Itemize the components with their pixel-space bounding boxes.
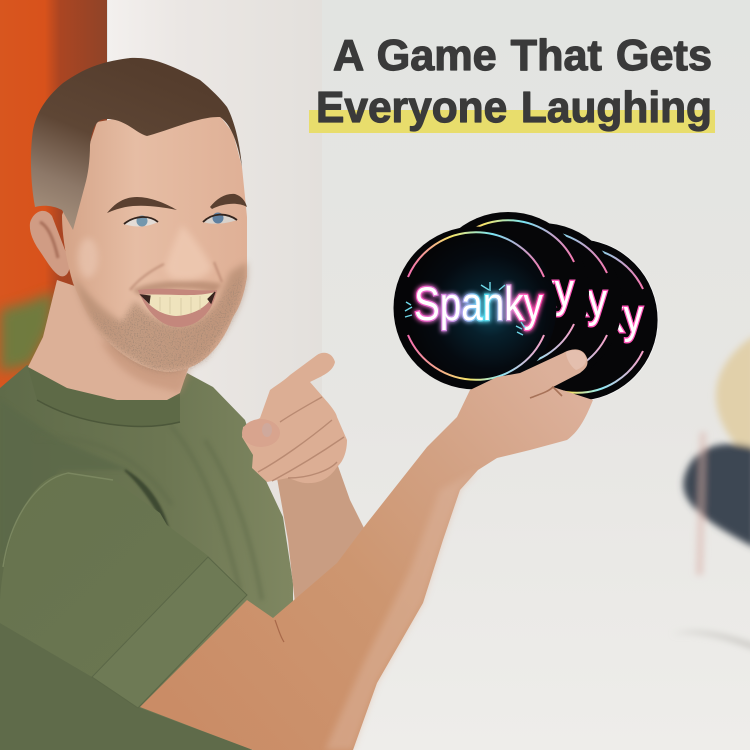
disc two	[427, 212, 589, 374]
palm crease	[530, 387, 562, 398]
forearm edge light	[325, 470, 478, 750]
t-shirt body	[0, 365, 293, 750]
thumb nail	[262, 423, 272, 437]
left eye	[124, 216, 158, 226]
neck shadow	[100, 340, 190, 393]
cuff	[92, 557, 247, 708]
hair	[31, 58, 242, 230]
curtain	[0, 0, 107, 400]
cheek highlight	[78, 238, 98, 278]
logo: Spanky	[414, 277, 543, 330]
face	[62, 115, 247, 372]
armpit shadow	[125, 470, 168, 528]
neck	[28, 280, 205, 400]
disc four: Spanky	[515, 289, 643, 342]
stubble base	[73, 262, 247, 372]
moustache	[132, 281, 222, 296]
chest folds	[35, 425, 262, 600]
shoulder shade	[0, 400, 130, 560]
game discs	[394, 212, 658, 401]
inner ear	[40, 222, 58, 258]
ear	[30, 211, 70, 276]
front ring top	[408, 232, 544, 277]
right brow	[210, 194, 247, 209]
holding arm and hand	[140, 349, 593, 750]
stubble speckle	[90, 275, 245, 372]
pointing hand	[242, 353, 347, 483]
disc four	[496, 239, 658, 401]
front ring bottom	[408, 335, 544, 380]
disc three	[460, 223, 622, 385]
elbow crease	[275, 620, 284, 642]
title line two: Everyone Laughing	[316, 83, 712, 132]
collar band	[28, 367, 180, 426]
finger creases	[258, 397, 344, 481]
smile lines	[130, 262, 222, 290]
thumb nail	[566, 350, 586, 370]
disc three: Spanky	[479, 273, 607, 326]
shirt sleeve	[0, 473, 247, 708]
nose	[165, 225, 212, 280]
title	[309, 31, 715, 133]
right eye	[203, 212, 237, 224]
left brow	[107, 197, 177, 213]
sleeve seam	[3, 473, 113, 567]
disc one: front	[394, 226, 556, 390]
tooth gaps	[160, 296, 200, 315]
mouth	[138, 289, 217, 327]
head	[30, 58, 247, 372]
logo glow: Spanky	[414, 277, 543, 330]
lower body shadow	[0, 620, 253, 750]
sparkles	[405, 282, 525, 335]
pointing forearm	[277, 466, 365, 603]
title line one: A Game That Gets	[333, 31, 712, 80]
blurred background objects	[672, 335, 750, 650]
thumb	[242, 419, 280, 447]
title highlight	[309, 110, 715, 133]
plant	[0, 292, 54, 372]
disc two: Spanky	[446, 263, 574, 316]
